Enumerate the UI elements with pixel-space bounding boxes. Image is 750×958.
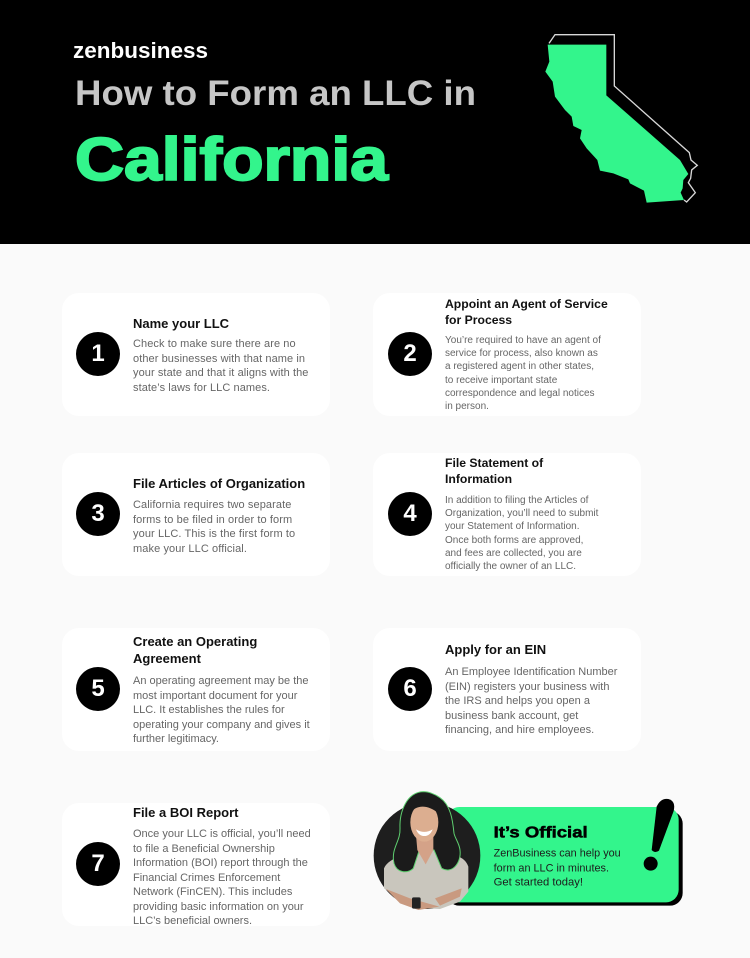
green panel [447,807,683,906]
body text: Organization, you’ll need to submit [445,508,598,519]
body text: In addition to filing the Articles of [445,495,588,506]
heading: Create an Operating [133,634,257,649]
body text [133,675,310,745]
body text: correspondence and legal notices [445,388,595,399]
number 6 [388,667,432,711]
heading [133,634,257,666]
heading: File Statement of [445,456,543,470]
card 2 [373,293,641,416]
heading: Agreement [133,651,201,666]
body text [445,335,601,412]
body text: to file a Beneficial Ownership [133,842,275,854]
body text: California requires two separate [133,499,292,511]
body text: a registered agent in other states, [445,361,594,372]
body text: operating your company and gives it [133,718,310,730]
title line: How to Form an LLC in [75,74,476,113]
body text: your LLC. This is the first form to [133,528,295,540]
body text: Once both forms are approved, [445,535,583,546]
callout text: Get started today! [494,877,583,889]
body text: LLC. It establishes the rules for [133,704,285,716]
body text: and fees are collected, you are [445,548,582,559]
callout text [494,848,621,889]
body text: your Statement of Information. [445,521,580,532]
card 1 [62,293,330,416]
heading [445,297,608,327]
body text: providing basic information on your [133,900,304,912]
body text: other businesses with that name in [133,353,305,365]
body text: to receive important state [445,375,557,386]
number 7: 7 [91,850,105,877]
number 1 [76,332,120,376]
body text [445,495,598,572]
heading [445,456,544,486]
icon: California map [545,35,697,203]
callout: It's Official [374,791,683,910]
card 3 [62,453,330,576]
body text [133,338,308,394]
number 5: 5 [91,675,105,702]
card 7 [62,803,330,926]
body text: in person. [445,401,489,412]
body text: state’s laws for LLC names. [133,382,270,394]
body text: Once your LLC is official, you’ll need [133,828,311,840]
body text: business bank account, get [445,710,578,722]
body text [445,666,618,736]
body text: financing, and hire employees. [445,724,594,736]
header banner [0,0,750,244]
callout heading: It’s Official [494,824,588,841]
heading: File Articles of Organization [133,476,305,491]
body text: forms to be filed in order to form [133,514,292,526]
body text [133,828,311,927]
heading: Apply for an EIN [445,642,546,657]
body text: Check to make sure there are no [133,338,296,350]
body text: make your LLC official. [133,542,247,554]
body text: most important document for your [133,690,297,702]
body text: (EIN) registers your business with [445,680,609,692]
heading: for Process [445,313,512,327]
number 3 [76,492,120,536]
number 2 [388,332,432,376]
number 3: 3 [91,500,105,527]
heading: Name your LLC [133,316,229,331]
body text: Network (FinCEN). This includes [133,886,292,898]
callout text: ZenBusiness can help you [494,848,621,860]
body text: Financial Crimes Enforcement [133,872,280,884]
heading: Appoint an Agent of Service [445,297,608,311]
body text: the IRS and helps you open a [445,695,590,707]
portrait [374,792,480,910]
card 5 [62,628,330,751]
body text: You’re required to have an agent of [445,335,601,346]
number 2: 2 [403,340,417,367]
body text: officially the owner of an LLC. [445,561,576,572]
body text: An operating agreement may be the [133,675,309,687]
body text [133,499,295,554]
logo: zenbusiness [73,38,208,63]
body text: LLC’s beneficial owners. [133,915,252,927]
number 6: 6 [403,675,417,702]
card 4 [373,453,641,576]
body text: your state and that it aligns with the [133,367,308,379]
heading: File a BOI Report [133,805,238,820]
body text: An Employee Identification Number [445,666,617,678]
number 7 [76,842,120,886]
callout text: form an LLC in minutes. [494,862,609,874]
number 1: 1 [91,340,105,367]
number 4 [388,492,432,536]
number 5 [76,667,120,711]
icon: exclamation mark [644,799,674,871]
heading: Information [445,472,512,486]
card 6 [373,628,641,751]
title state name: California [75,126,389,193]
body text: service for process, also known as [445,348,598,359]
body text: further legitimacy. [133,733,219,745]
body text: Information (BOI) report through the [133,857,308,869]
number 4: 4 [403,500,417,527]
